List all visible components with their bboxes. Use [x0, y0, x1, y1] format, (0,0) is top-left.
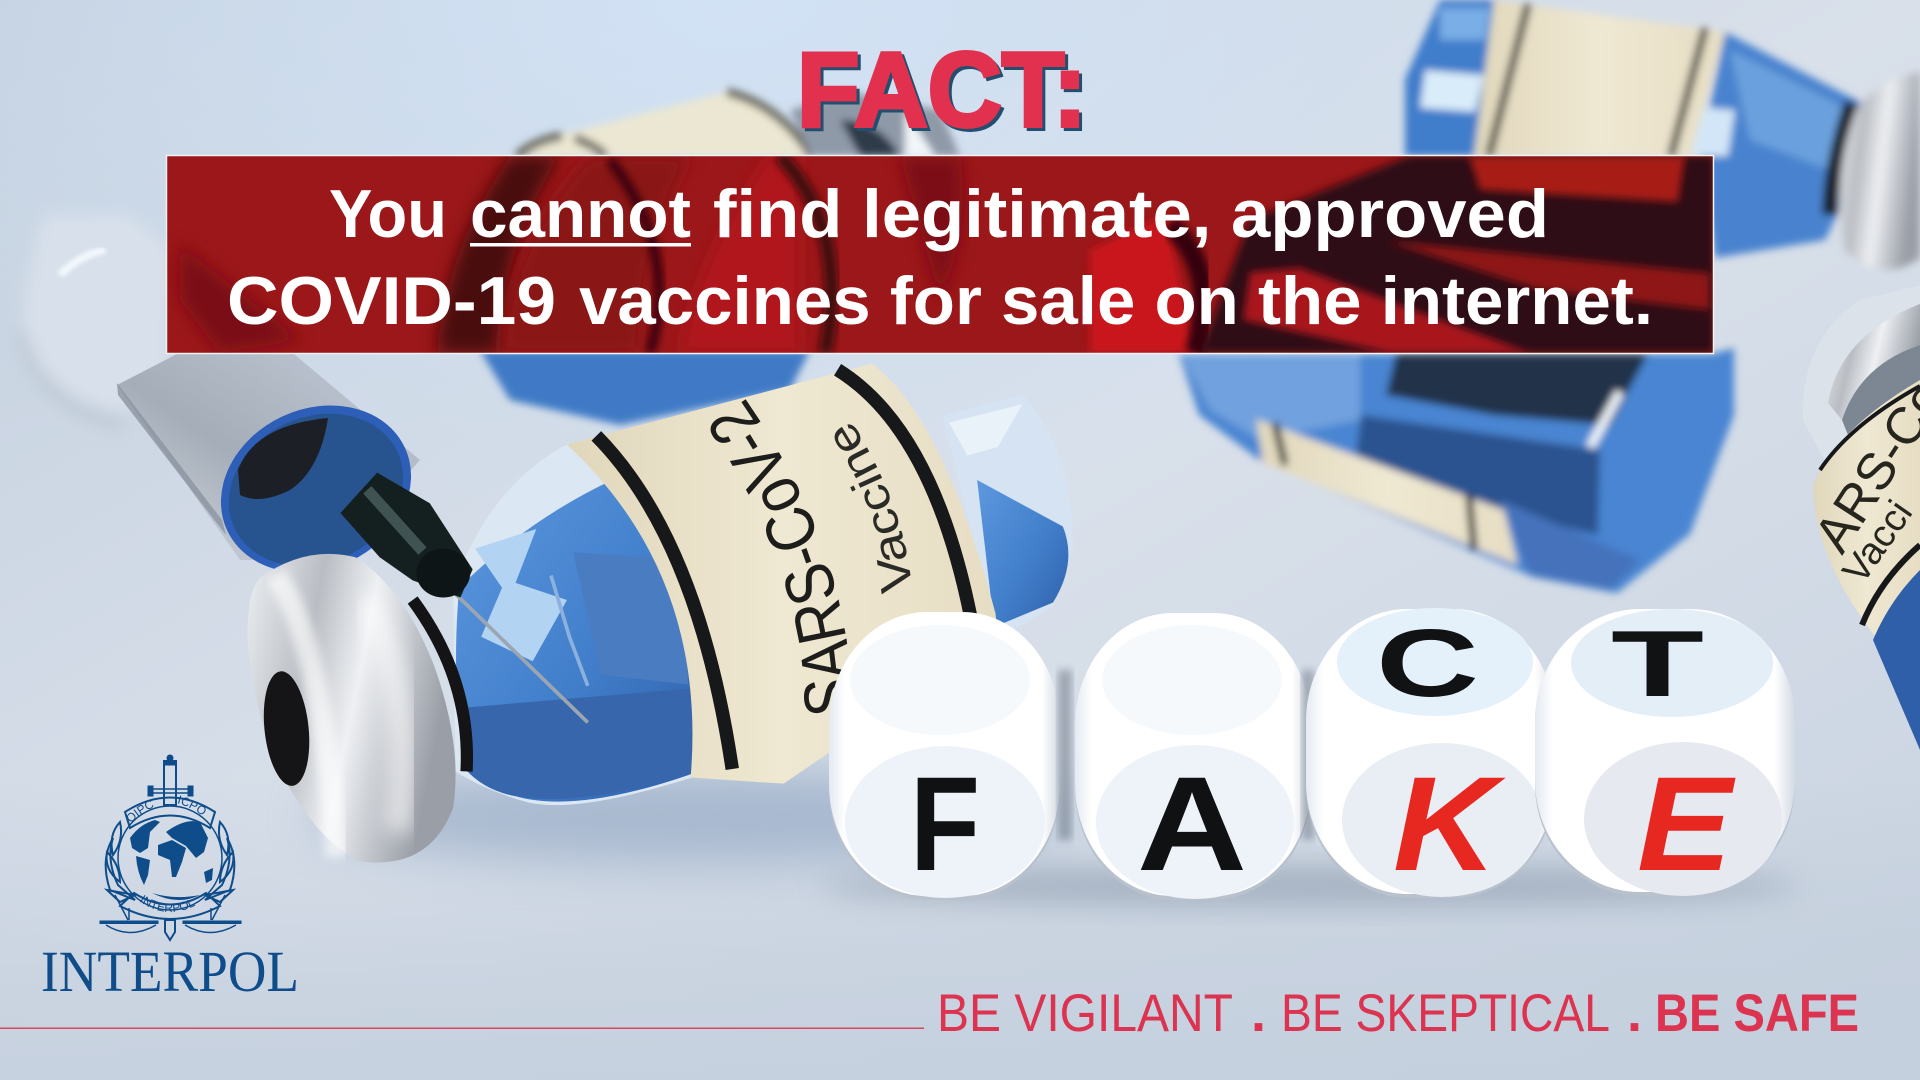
banner panel	[166, 155, 1714, 354]
banner text: find legitimate, approved	[713, 176, 1549, 252]
die A	[1075, 613, 1311, 900]
headline: FACT:: FACT:	[797, 31, 1087, 149]
slogan: BE VIGILANT	[937, 984, 1233, 1043]
dice shadow	[820, 866, 1800, 906]
logo: INTERPOL emblem	[100, 754, 242, 942]
needle	[456, 594, 588, 722]
motto ribbon: ICPO	[178, 796, 206, 814]
cap hole	[259, 669, 314, 788]
die C/K	[1306, 608, 1555, 899]
glass shoulder	[1816, 427, 1848, 458]
label stripes	[596, 370, 971, 769]
slogan: BE SAFE	[1655, 984, 1859, 1043]
label text: far vial second line: Vacci	[1835, 493, 1920, 591]
headline: FACT:: FACT:	[800, 34, 1090, 152]
banner photo tint	[180, 156, 1714, 353]
liquid	[456, 480, 694, 802]
logo wordmark: INTERPOL	[41, 939, 299, 1004]
glass end	[943, 394, 1073, 639]
slogan: BE SKEPTICAL	[1281, 984, 1610, 1043]
die T/E	[1535, 609, 1795, 899]
banner text: cannot	[470, 176, 691, 252]
sword	[148, 755, 193, 940]
slogan	[937, 984, 1859, 1043]
label	[1813, 380, 1920, 636]
gap shadow	[1302, 670, 1314, 840]
gap shadow	[1058, 670, 1072, 840]
letter A: A	[1137, 750, 1247, 899]
banner text	[227, 176, 1653, 339]
syringe glass end	[20, 215, 170, 425]
scales	[100, 895, 241, 932]
dice: FAKE / FACT	[829, 608, 1795, 900]
banner text: vaccines for sale on the internet.	[579, 263, 1653, 339]
paper label	[567, 364, 998, 784]
letter E: E	[1637, 750, 1736, 899]
needle hub	[340, 473, 473, 598]
globe	[118, 806, 222, 910]
syringe flange	[193, 375, 439, 603]
label text: Vaccine: Vaccine	[834, 424, 910, 594]
main vial	[248, 364, 1072, 862]
label text: SARS-CoV-2: SARS-CoV-2	[710, 399, 848, 714]
syringe tube	[117, 354, 420, 560]
letter C: C	[1376, 610, 1479, 717]
main vial shadow	[310, 767, 1070, 863]
liquid reflections	[475, 529, 567, 661]
vial: top right (blurred)	[1405, 0, 1920, 270]
slogan: .	[1251, 984, 1266, 1043]
gap shadow	[1548, 670, 1558, 830]
metal collar	[1828, 304, 1920, 420]
name ribbon	[118, 892, 222, 920]
syringe	[20, 215, 439, 603]
aluminium cap	[247, 554, 456, 862]
vial: top centre (blurred)	[480, 92, 960, 425]
stopper gasket	[413, 600, 467, 771]
glass shoulder	[453, 443, 692, 805]
vial: middle right (blurred)	[1179, 348, 1734, 593]
vial: far right	[1813, 304, 1920, 750]
die F	[829, 612, 1060, 900]
slogan: .	[1627, 984, 1642, 1043]
letter F: F	[910, 750, 980, 899]
footer rule	[0, 1028, 924, 1029]
motto ribbon: OIPC	[127, 801, 154, 822]
letter T: T	[1611, 611, 1704, 716]
name ribbon: INTERPOL	[140, 895, 196, 912]
letter K: K	[1393, 750, 1506, 899]
motto ribbon	[124, 796, 216, 830]
banner text: You	[329, 176, 447, 252]
banner text: COVID-19	[227, 263, 556, 339]
laurel wreath	[106, 822, 234, 902]
